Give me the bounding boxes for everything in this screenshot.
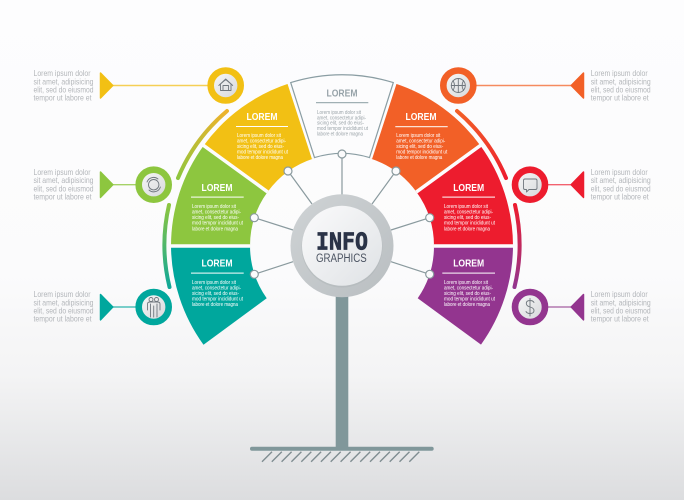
panel: white top segment: amet, consectetur adipi- [317,115,366,121]
arc: green to teal [164,205,170,287]
icon: circles [147,177,160,192]
panel: teal segment: sicing elit, sed do eius- [192,291,239,297]
panel: green segment: mod tempor incididunt ut [192,220,243,226]
callout: green: elit, sed do eiusmod [34,184,94,194]
callout: red: elit, sed do eiusmod [591,184,651,194]
heading: teal: LOREM [202,259,232,270]
panel: yellow segment: Lorem ipsum dolor sit [237,133,281,139]
panel: purple segment: amet, consectetur adipi- [444,285,493,291]
panel: white top segment: labore et dolore magna [317,131,363,137]
panel: white top segment: Lorem ipsum dolor sit [317,110,361,116]
callout: purple [515,290,651,324]
panel: red segment: mod tempor incididunt ut [444,220,495,226]
callout: purple: tempor ut labore et [591,315,649,324]
panel: teal segment: mod tempor incididunt ut [192,297,243,303]
heading: orange: LOREM [406,112,436,123]
panel: red segment: sicing elit, sed do eius- [444,215,491,221]
panel: green segment: labore et dolore magna [192,226,238,232]
panel: orange segment: mod tempor incididunt ut [396,150,448,156]
panel: purple segment: sicing elit, sed do eius- [444,291,491,297]
arc: red to purple [514,205,520,287]
callout: orange: elit, sed do eiusmod [591,86,651,94]
panel: teal segment: labore et dolore magna [192,302,238,308]
callout: orange [443,69,651,103]
callout: yellow [34,69,241,103]
panel: orange segment: labore et dolore magna [396,155,442,161]
callout: green: sit amet, adipisicing [34,176,94,185]
callout: orange: Lorem ipsum dolor [591,69,648,78]
callout: orange: sit amet, adipisicing [591,77,651,86]
icon: people [148,298,160,317]
panel: orange segment: Lorem ipsum dolor sit [396,133,441,139]
callout: purple: sit amet, adipisicing [591,298,651,307]
subtitle: GRAPHICS: GRAPHICS [316,253,367,265]
panel: white top segment [291,75,393,158]
panel: green segment: Lorem ipsum dolor sit [192,204,236,210]
icon: speech bubble [524,179,537,192]
panel: purple segment: Lorem ipsum dolor sit [444,280,488,286]
callout: green: Lorem ipsum dolor [34,168,91,177]
title: INFO: INFO [316,229,368,255]
callout: yellow: sit amet, adipisicing [34,77,94,86]
callout: purple: Lorem ipsum dolor [591,290,648,299]
callout: purple: elit, sed do eiusmod [591,306,651,316]
pole [250,290,434,462]
callout: teal: Lorem ipsum dolor [34,290,91,299]
callout: orange: tempor ut labore et [591,94,649,103]
panel: purple segment: mod tempor incididunt ut [444,297,495,303]
callout: teal: sit amet, adipisicing [34,298,94,307]
callout: red [515,168,651,202]
callout: green [34,168,169,202]
panel: red segment: labore et dolore magna [444,226,490,232]
panel: orange segment: amet, consectetur adipi- [396,138,445,144]
panel: orange segment: sicing elit, sed do eius- [396,144,443,150]
arc: yellow to green [178,111,227,178]
heading: green: LOREM [202,183,232,194]
icon: dollar [526,298,534,316]
panel: orange segment [370,83,480,192]
arc: orange to red [457,111,506,178]
callout: red: Lorem ipsum dolor [591,168,648,177]
callout: green: tempor ut labore et [34,193,92,202]
panel: red segment [416,146,513,246]
panel: white top segment: mod tempor incididunt ut [317,126,368,132]
callout: teal: tempor ut labore et [34,315,92,324]
callout: yellow: tempor ut labore et [34,94,92,103]
heading: red: LOREM [453,183,484,194]
callout: teal: elit, sed do eiusmod [34,306,94,316]
panel: teal segment [171,246,267,345]
heading: white segment: LOREM [326,88,358,100]
panel: red segment: Lorem ipsum dolor sit [444,204,488,210]
panel: yellow segment: mod tempor incididunt ut [237,150,288,156]
panel: red segment: amet, consectetur adipi- [444,209,493,215]
panel: yellow segment: amet, consectetur adipi- [237,138,286,144]
callout: red: tempor ut labore et [591,193,649,202]
panel: white top segment: sicing elit, sed do eius- [317,121,364,127]
callout: red: sit amet, adipisicing [591,176,651,185]
panel: purple segment: labore et dolore magna [444,302,490,308]
panel: green segment: amet, consectetur adipi- [192,209,241,215]
heading: purple: LOREM [453,259,484,270]
panel: yellow segment: labore et dolore magna [237,155,283,161]
icon: basketball [451,78,465,92]
panel: yellow segment [204,83,314,192]
center hub [290,194,394,297]
heading: yellow: LOREM [246,112,278,123]
icon: house [219,79,233,90]
callout: teal [34,290,169,324]
callout: yellow: Lorem ipsum dolor [34,69,91,78]
callout: yellow: elit, sed do eiusmod [34,86,94,94]
panel: purple segment [418,246,513,345]
panel: teal segment: amet, consectetur adipi- [192,285,241,291]
spokes and nodes [250,150,434,278]
panel: teal segment: Lorem ipsum dolor sit [192,280,236,286]
panel: green segment: sicing elit, sed do eius- [192,215,239,221]
panel: green segment [171,146,268,246]
panel: yellow segment: sicing elit, sed do eius- [237,144,284,150]
